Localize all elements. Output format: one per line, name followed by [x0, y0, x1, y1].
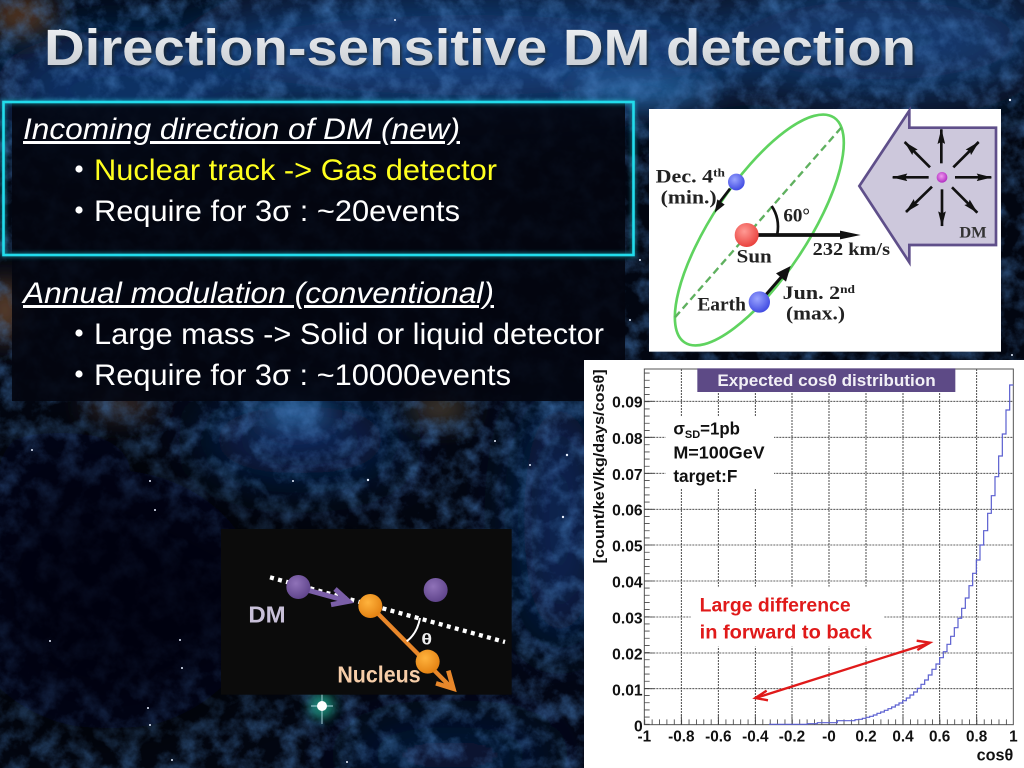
icon: DM particle: [286, 575, 310, 599]
arrow: Earth December: [715, 189, 730, 213]
x axis labels: -0.8: [668, 728, 695, 745]
chart: expected cos theta distribution: [584, 360, 1024, 768]
arrow: nucleus recoil: [378, 614, 453, 689]
y axis labels: 0.06: [612, 503, 643, 520]
x axis labels: -0.6: [705, 728, 732, 745]
angle arc: [407, 618, 420, 641]
orbit ellipse: [645, 91, 873, 369]
heading: incoming direction: Incoming direction of DM (new): [23, 113, 460, 146]
parameters note: =1pb: [700, 419, 740, 439]
heading: annual modulation: Annual modulation (conventional): [21, 277, 494, 310]
x axis labels: -0: [822, 728, 836, 745]
x axis labels: 0.6: [929, 728, 950, 745]
parameters note: [673, 419, 765, 486]
label: theta: θ: [421, 631, 432, 648]
parameters note: M=100GeV: [673, 442, 765, 462]
text block: incoming direction of DM: [23, 113, 497, 228]
parameters note: σ: [673, 419, 685, 439]
y axis title: [count/keV/kg/days/cosθ]: [592, 369, 608, 563]
y axis labels: 0.02: [612, 647, 643, 664]
label: Nucleus: Nucleus: [337, 662, 421, 688]
y axis labels: 0.07: [612, 467, 643, 484]
label: Sun: Sun: [737, 247, 772, 268]
x axis labels: 0.8: [966, 728, 988, 745]
arrow: forward to back: [755, 641, 930, 700]
panel: scattering diagram: [221, 529, 512, 695]
y axis labels: 0.09: [612, 394, 643, 411]
icon: nucleus recoiled: [416, 650, 440, 674]
axis ticks: [644, 369, 1013, 725]
x axis labels: 0.2: [855, 728, 877, 745]
label: 232 km/s: 232 km/s: [813, 239, 890, 259]
label: min: (min.): [661, 187, 717, 208]
x axis title: cosθ: [977, 746, 1013, 765]
bright star: [309, 693, 335, 724]
bullet: require 20 events: Require for 3σ : ~20events: [94, 195, 460, 228]
label: Dec 4th: Dec. 4: [656, 166, 704, 187]
angle arc 60 deg: [772, 206, 778, 234]
y axis labels: 0.05: [612, 539, 643, 556]
y axis labels: 0.01: [612, 683, 643, 700]
label: 60 degrees: 60°: [783, 206, 810, 227]
icon: nucleus at rest: [358, 594, 382, 618]
arrow: DM direction: [308, 589, 349, 605]
panel: text background: [12, 101, 625, 401]
y axis labels: 0: [634, 718, 643, 735]
x axis labels: 1: [1009, 728, 1018, 745]
icon: DM wind arrow: [859, 111, 996, 262]
icon: Earth December: [728, 174, 745, 190]
text block: annual modulation: [21, 277, 604, 392]
y axis labels: 0.08: [612, 431, 643, 448]
parameters note: SD: [685, 429, 700, 441]
callout: large difference: in forward to back: [700, 623, 872, 644]
y axis labels: 0.04: [612, 574, 643, 591]
label: max: (max.): [786, 303, 845, 324]
bullet: nuclear track: Nuclear track -> Gas detector: [94, 154, 497, 187]
chart title bar: [697, 368, 955, 392]
title: Direction-sensitive DM detection: [46, 21, 918, 78]
icon: DM particle scattered: [424, 578, 448, 602]
label: DM wind: DM: [959, 224, 987, 241]
x axis labels: 0.4: [892, 728, 914, 745]
histogram curve: [769, 385, 1013, 724]
label: DM: DM: [248, 601, 286, 627]
callout: large difference: [700, 596, 872, 644]
y axis labels: [612, 394, 643, 735]
panel: solar orbit diagram: [645, 91, 1001, 369]
title: Direction-sensitive DM detection: [44, 19, 916, 76]
bullet: require 10000 events: Require for 3σ : ~10000events: [94, 359, 511, 392]
parameters note: target:F: [673, 466, 737, 486]
orbit axis: [675, 126, 843, 317]
label: Jun 2nd: nd: [840, 284, 856, 296]
annotation background: [666, 417, 774, 488]
y axis labels: 0.03: [612, 611, 643, 628]
icon: Earth June: [749, 291, 770, 313]
icon: Sun: [735, 223, 759, 247]
panel: incoming direction highlight box: [4, 102, 634, 255]
label: Earth: Earth: [697, 295, 747, 316]
x axis labels: -1: [638, 728, 652, 745]
arrow: Earth June: [766, 266, 791, 295]
chart title bar: Expected cosθ distribution: [717, 371, 936, 390]
arrow: Sun velocity: [757, 231, 861, 239]
bullet: large mass: Large mass -> Solid or liquid detector: [94, 318, 604, 351]
label: Jun 2nd: Jun. 2: [783, 283, 831, 304]
grid: [644, 369, 1013, 725]
x axis labels: -0.4: [742, 728, 769, 745]
callout: large difference: Large difference: [700, 596, 851, 617]
axes frame: [644, 369, 1013, 725]
x axis labels: -0.2: [779, 728, 805, 745]
label: Dec 4th: th: [713, 167, 726, 179]
x axis labels: [638, 728, 1018, 745]
